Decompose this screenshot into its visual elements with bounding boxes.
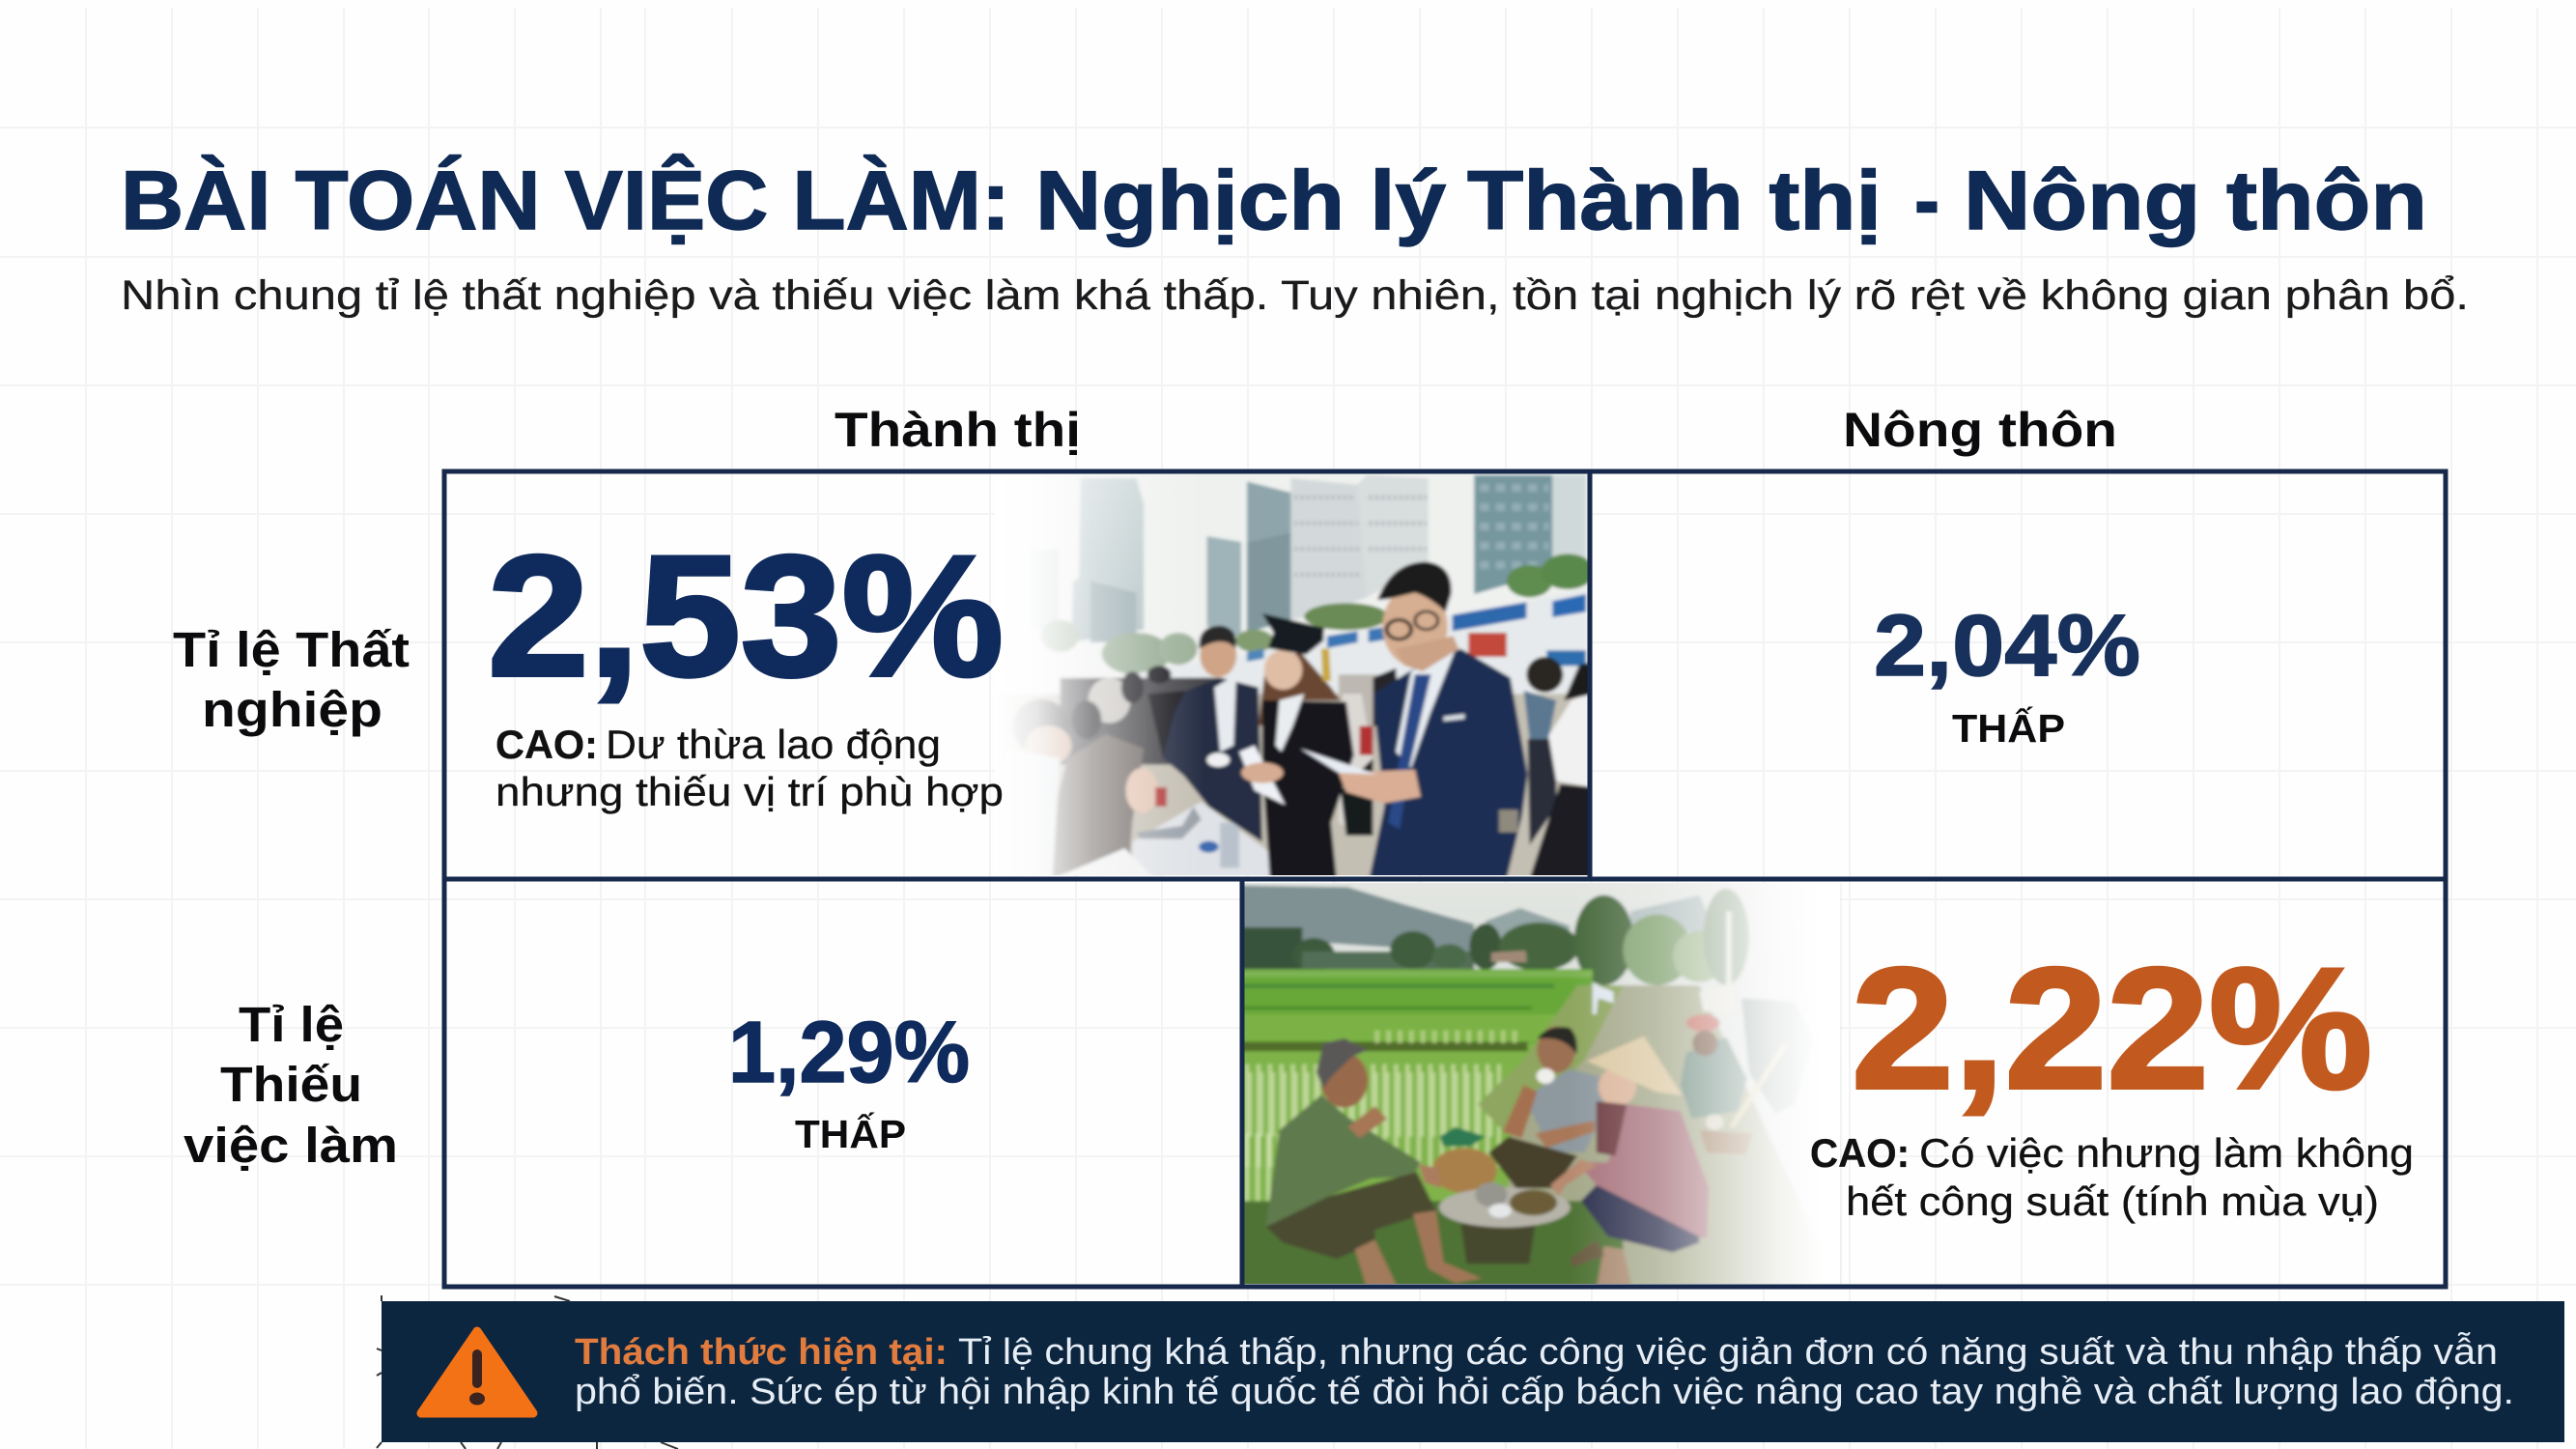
man with lanyard [1163,678,1262,842]
title: Thành thị [1467,155,1882,247]
statistic: 2,04%: 2,04% [1874,598,2140,695]
panel: urban unemployment with photo [488,469,1595,887]
caption: urban unemployment [495,722,1004,814]
subtitle: Nhìn chung tỉ lệ thất nghiệp và thiếu việc làm khá thấp. Tuy nhiên, tồn tại nghịch lý rõ rệt về không gian phân bổ. [121,272,2469,319]
background workers [1741,998,1789,1111]
callout text: Thách thức hiện tại: [575,1332,948,1373]
panel: rural unemployment [1874,598,2140,751]
title: - [1914,155,1939,247]
panel: rural underemployment with photo [1241,879,2414,1290]
panel: urban underemployment [728,1005,970,1156]
title: Nông thôn [1964,155,2427,247]
row heading: Tỉ lệ Thất nghiệp: Tỉ lệ Thất [173,622,410,677]
man in front [1369,649,1528,879]
title [121,155,2427,247]
caption: rural underemployment: CAO: [1810,1130,1910,1176]
graduate [1259,652,1341,726]
caption: rural underemployment [1810,1130,2414,1224]
statistic: 2,22%: 2,22% [1852,932,2372,1124]
photo: farmers resting in rice field [1241,879,1840,1290]
basket [1432,1148,1497,1193]
caption: urban unemployment: Dư thừa lao động [606,722,941,767]
callout text [575,1331,2514,1412]
row heading: Tỉ lệ Thất nghiệp [173,622,410,737]
row heading: Tỉ lệ Thất nghiệp: nghiệp [202,682,382,737]
matrix frame [444,471,2446,1287]
icon: warning triangle [421,1331,533,1413]
row heading: Tỉ lệ Thiếu việc làm: việc làm [184,1118,398,1173]
man left [1266,1094,1421,1230]
row heading: Tỉ lệ Thiếu việc làm: Tỉ lệ [239,997,344,1052]
caption: urban unemployment: nhưng thiếu vị trí phù hợp [495,769,1004,814]
man centre [1524,1069,1608,1152]
statistic: 1,29%: 1,29% [728,1005,970,1101]
row heading: Tỉ lệ Thiếu việc làm: Thiếu [220,1057,362,1112]
woman with conical hat [1577,1104,1709,1238]
title: Nghịch lý [1035,155,1446,247]
paddy [1241,969,1593,1043]
callout: current challenge [377,1295,2564,1449]
title: BÀI TOÁN VIỆC LÀM: [121,155,1010,247]
caption: rural underemployment: Có việc nhưng làm không [1919,1130,2414,1176]
sketch marks [377,1295,678,1449]
caption: rural underemployment: hết công suất (tính mùa vụ) [1846,1179,2379,1224]
table and tray [1460,1224,1535,1264]
column heading: Thành thị: Thành thị [835,403,1081,457]
statistic: 2,53%: 2,53% [488,520,1004,712]
table [1130,801,1273,875]
row heading: Tỉ lệ Thiếu việc làm [184,997,398,1173]
path [1507,983,1788,1284]
column heading: Nông thôn: Nông thôn [1843,403,2117,457]
photo: job fair in the city [995,469,1595,887]
label: THẤP: THẤP [1952,706,2065,751]
right side people [1524,691,1556,739]
callout text: phổ biến. Sức ép từ hội nhập kinh tế quốc tế đòi hỏi cấp bách việc nâng cao tay nghề và chất lượng lao động. [575,1372,2514,1412]
foreground woman and recruiter [1053,734,1145,875]
banner background [382,1301,2564,1442]
caption: urban unemployment: CAO: [495,722,598,767]
label: THẤP: THẤP [795,1112,906,1156]
callout text: Tỉ lệ chung khá thấp, nhưng các công việc giản đơn có năng suất và thu nhập thấp vẫn [958,1331,2498,1373]
